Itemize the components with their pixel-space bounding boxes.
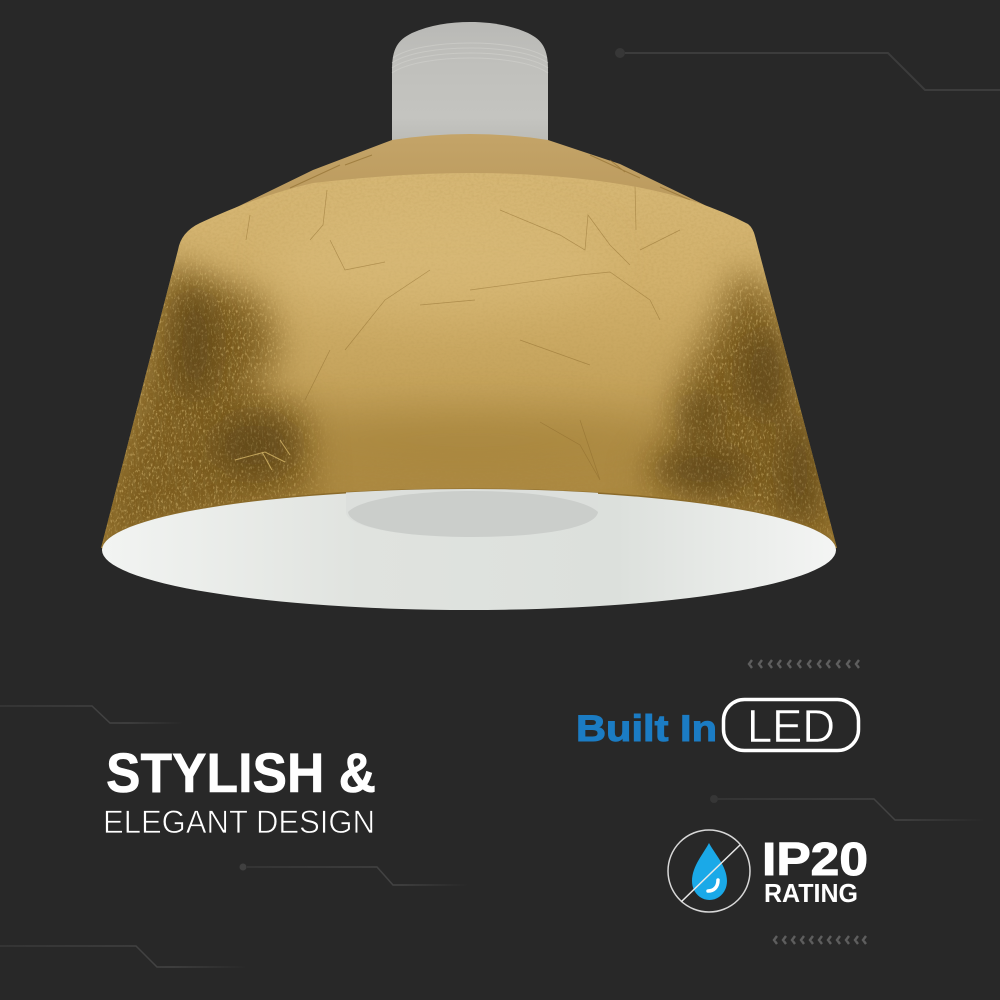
- decorative circuit line: left mid: [240, 864, 468, 885]
- heading line 2: ELEGANT DESIGN: [103, 804, 375, 840]
- decorative circuit line: left upper: [0, 706, 183, 723]
- lamp inner white reflector: [102, 488, 836, 610]
- chevrons: below IP20: [774, 936, 866, 944]
- LED badge: LED: [747, 700, 835, 752]
- LED badge: [724, 700, 858, 752]
- decorative circuit line: left lower: [0, 946, 247, 967]
- decorative circuit line: mid right: [710, 795, 985, 820]
- lamp LED lens: [346, 488, 598, 537]
- worn dark leaf patches: [102, 247, 836, 548]
- lamp cone top: [200, 134, 748, 226]
- rating text: [762, 833, 868, 908]
- heading line 1: STYLISH &: [106, 741, 376, 804]
- heading: stylish and elegant design: [103, 741, 376, 840]
- label: built in: Built In: [576, 708, 717, 749]
- rating text: IP20: [762, 833, 868, 885]
- rating text: RATING: [764, 878, 858, 908]
- gold leaf cracks: [246, 185, 680, 480]
- feature: built in LED: [576, 700, 858, 752]
- lamp neck: [392, 22, 548, 150]
- lamp shade gold body: [90, 160, 850, 560]
- feature: IP20 rating: [668, 830, 868, 912]
- decorative circuit line: top right: [615, 48, 1000, 90]
- icon: crossed water drop: [668, 830, 750, 912]
- chevrons: above LED: [749, 660, 859, 668]
- product photo: gold pendant lamp: [90, 22, 850, 610]
